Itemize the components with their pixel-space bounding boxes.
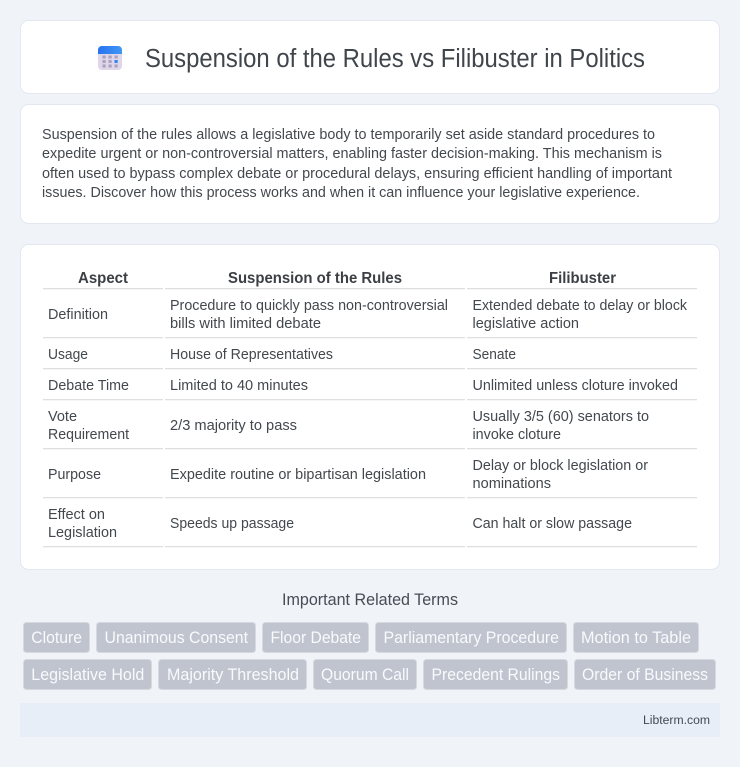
heading: important related terms: Important Related Terms	[282, 591, 458, 609]
table header row	[43, 270, 697, 289]
icon: calendar	[98, 46, 122, 70]
tag: Order of Business: Order of Business	[582, 666, 708, 684]
tag: Motion to Table	[574, 622, 698, 652]
row: Definition: Definition	[48, 307, 108, 323]
table header row: Filibuster	[549, 270, 616, 287]
row: Usage	[43, 347, 697, 369]
row: Effect on Legislation: Effect on	[48, 507, 105, 523]
row: Definition: Extended debate to delay or block	[472, 298, 688, 314]
tag: Cloture	[24, 622, 90, 652]
footer bar	[20, 703, 720, 737]
row: Effect on Legislation: Can halt or slow passage	[472, 516, 632, 532]
row: Vote Requirement	[43, 409, 697, 449]
tag: Quorum Call: Quorum Call	[321, 666, 409, 684]
row: Definition	[43, 298, 697, 338]
row: Purpose: Expedite routine or bipartisan legislation	[170, 467, 426, 483]
row: Purpose	[43, 458, 697, 498]
row: Definition: legislative action	[472, 316, 579, 332]
intro text block	[42, 127, 672, 201]
row: Vote Requirement: Requirement	[48, 427, 129, 443]
row: Definition: Procedure to quickly pass non-controversial	[170, 298, 448, 314]
row: Debate Time	[43, 378, 697, 400]
row: Debate Time: Limited to 40 minutes	[170, 378, 308, 394]
tag: Quorum Call	[314, 660, 416, 690]
tag: Floor Debate: Floor Debate	[270, 629, 361, 647]
intro text block: often used to bypass complex debate or procedural delays, ensuring efficient handling of important	[42, 166, 672, 182]
row: Usage: House of Representatives	[170, 347, 333, 363]
row: Vote Requirement: Vote	[48, 409, 77, 425]
row: Purpose: Delay or block legislation or	[472, 458, 648, 474]
tag: Cloture: Cloture	[31, 629, 82, 647]
intro text block: Suspension of the rules allows a legislative body to temporarily set aside standard procedures to	[42, 127, 655, 143]
tag: Legislative Hold	[24, 660, 152, 690]
tag: Majority Threshold	[158, 660, 306, 690]
title: Suspension of the Rules vs Filibuster in Politics	[145, 45, 645, 73]
row: Effect on Legislation	[43, 507, 697, 547]
panel: comparison table	[20, 244, 720, 570]
row: Purpose: nominations	[472, 476, 551, 492]
row: Usage: Usage	[48, 347, 88, 363]
tag: Precedent Rulings	[424, 660, 568, 690]
row: Vote Requirement: 2/3 majority to pass	[170, 418, 297, 434]
intro text block: issues. Discover how this process works and when it can influence your legislative experience.	[42, 185, 640, 201]
tag: Motion to Table: Motion to Table	[581, 629, 691, 647]
tag: Order of Business	[574, 660, 716, 690]
tag: Floor Debate	[262, 622, 368, 652]
tag: Majority Threshold: Majority Threshold	[167, 666, 299, 684]
footer credit: Libterm.com	[643, 713, 710, 727]
tag: Parliamentary Procedure	[376, 622, 566, 652]
table header row: Aspect	[78, 270, 129, 287]
row: Effect on Legislation: Speeds up passage	[170, 516, 294, 532]
row: Definition: bills with limited debate	[170, 316, 321, 332]
intro text block: expedite urgent or non-controversial matters, enabling faster decision-making. This mechanism is	[42, 146, 662, 162]
tag: Unanimous Consent: Unanimous Consent	[104, 629, 248, 647]
tag: Legislative Hold: Legislative Hold	[31, 666, 144, 684]
row: Vote Requirement: invoke cloture	[472, 427, 561, 443]
row: Effect on Legislation: Legislation	[48, 525, 117, 541]
row: Debate Time: Unlimited unless cloture invoked	[472, 378, 678, 394]
tag: Unanimous Consent	[96, 622, 256, 652]
row: Usage: Senate	[472, 347, 516, 363]
tag: Parliamentary Procedure: Parliamentary Procedure	[384, 629, 559, 647]
row: Debate Time: Debate Time	[48, 378, 129, 394]
row: Vote Requirement: Usually 3/5 (60) senators to	[472, 409, 649, 425]
related term tags	[24, 622, 716, 690]
row: Purpose: Purpose	[48, 467, 101, 483]
table header row: Suspension of the Rules	[228, 270, 402, 287]
panel: intro paragraph	[20, 104, 720, 224]
panel: header	[20, 20, 720, 94]
tag: Precedent Rulings: Precedent Rulings	[432, 666, 560, 684]
